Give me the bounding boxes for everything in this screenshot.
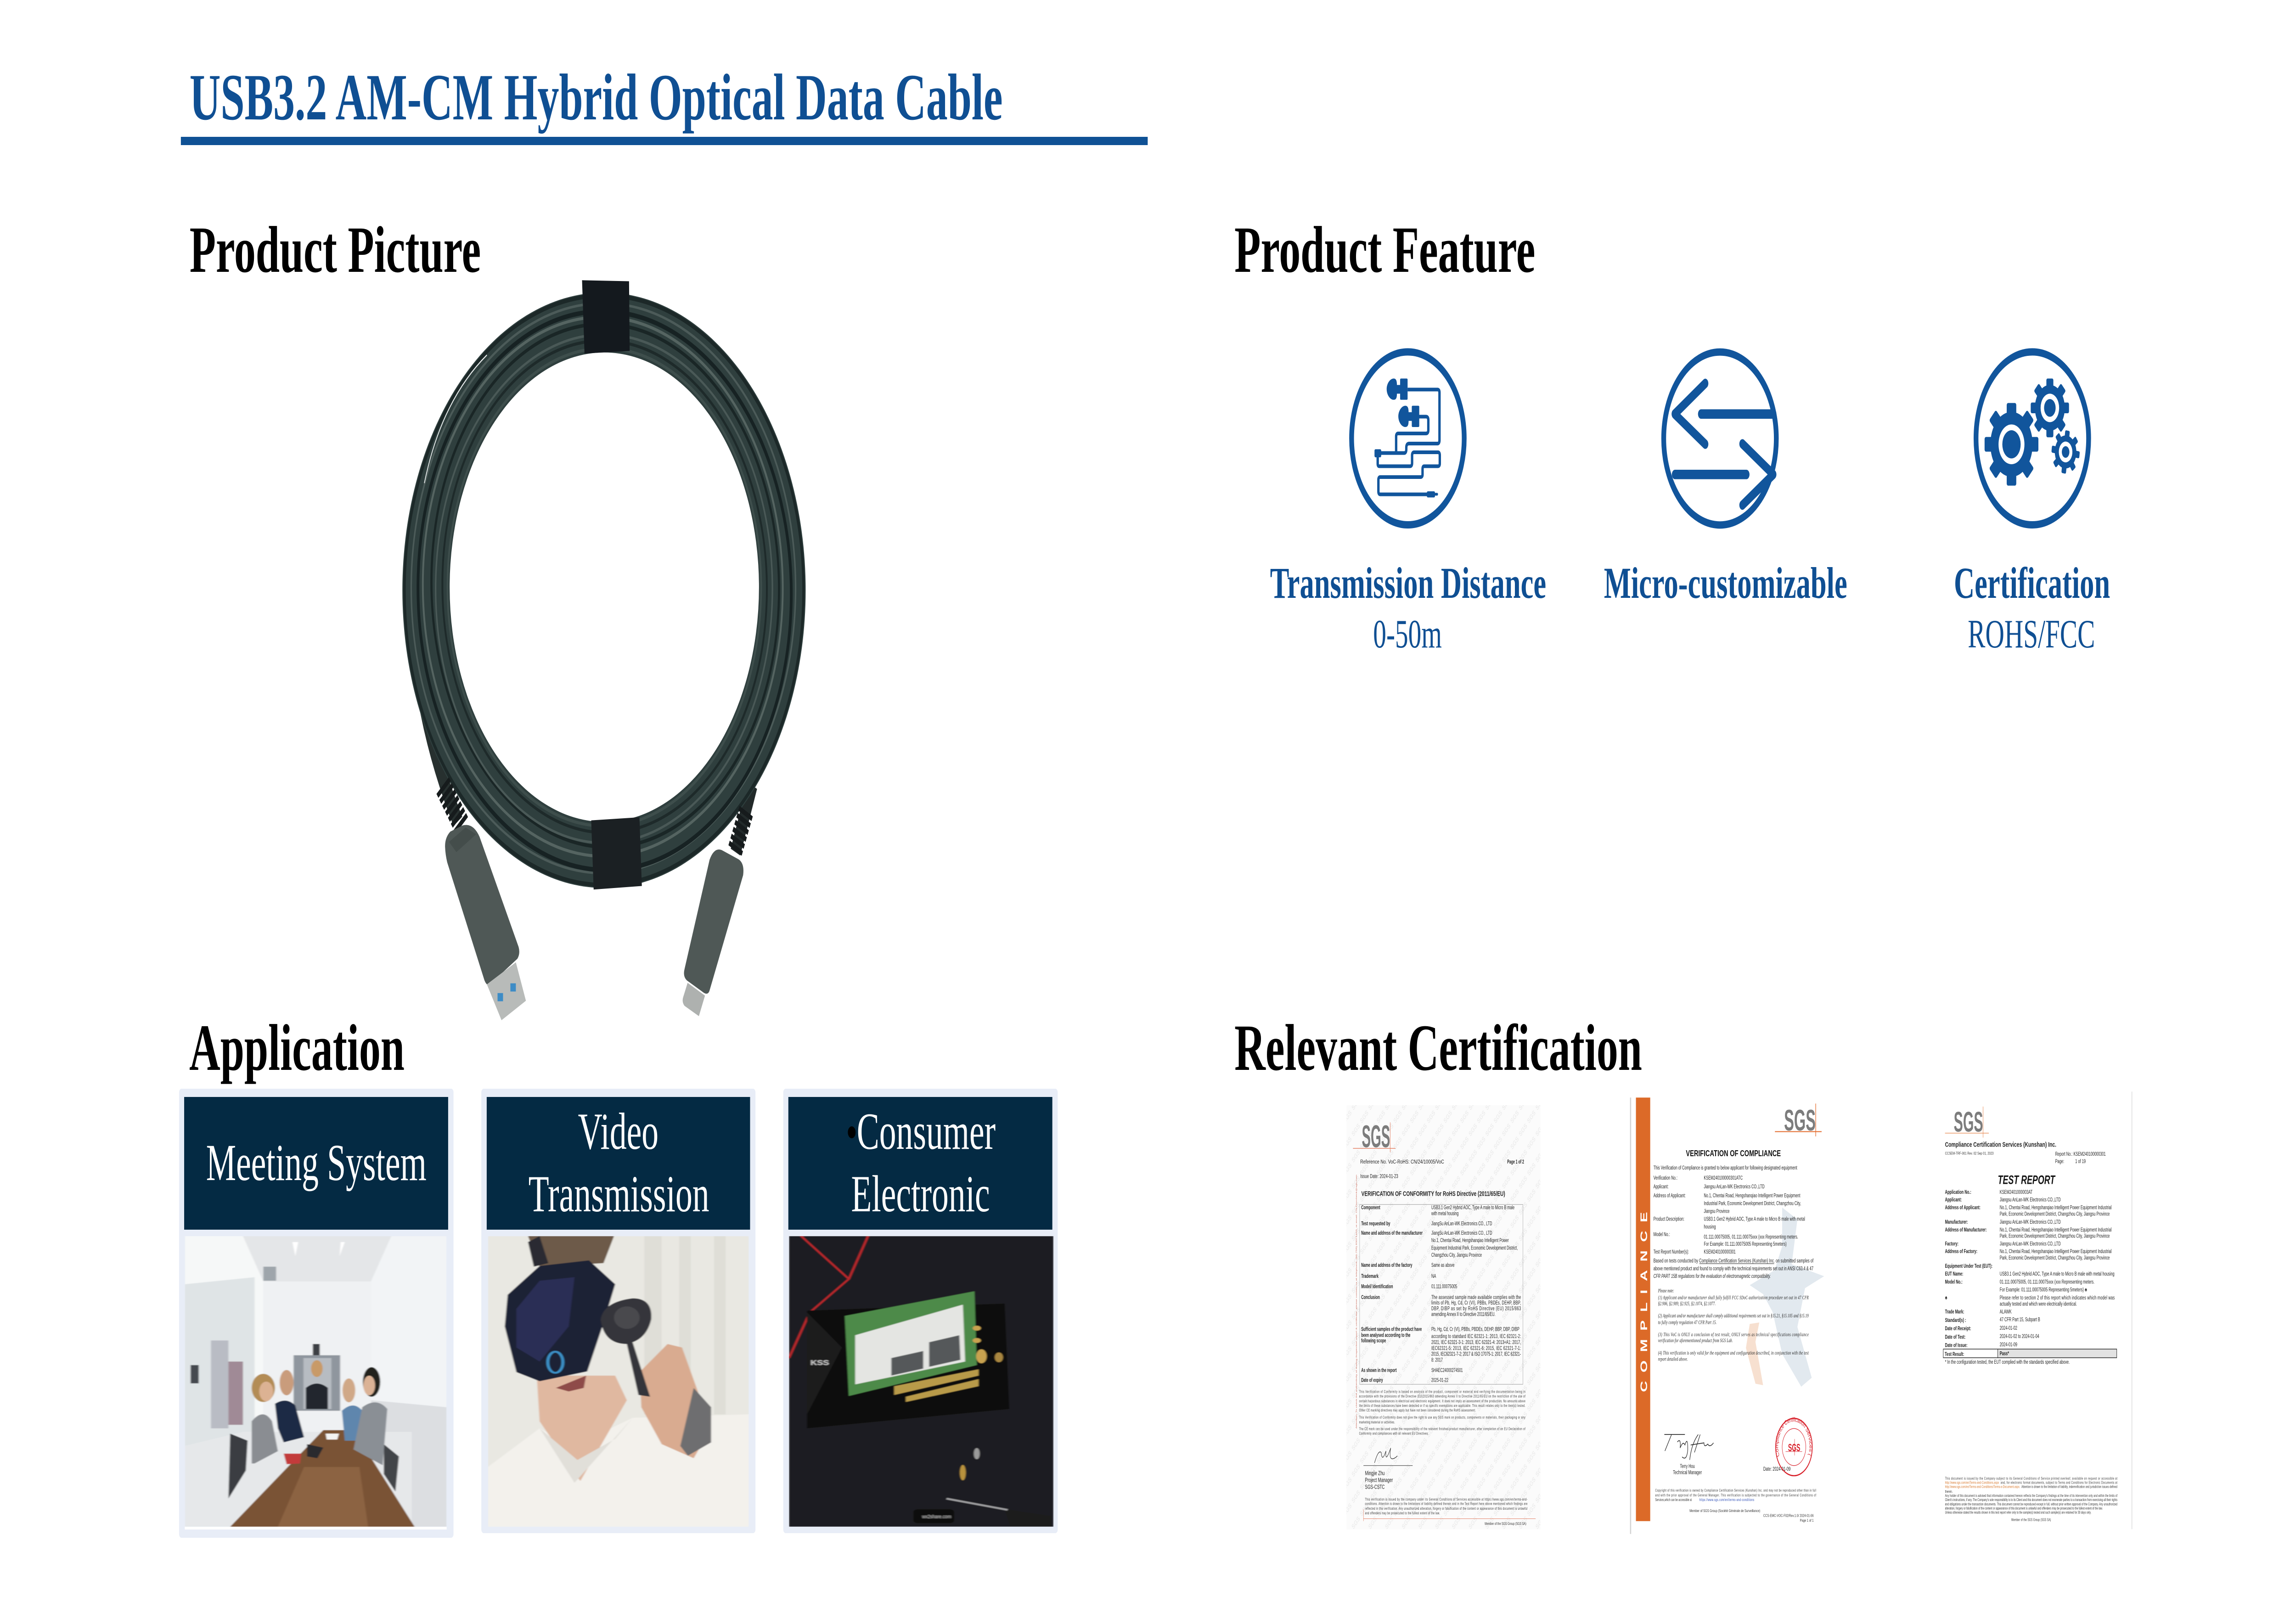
certificate: RoHS verification of conformity: DBP, DIBP as set by RoHS Directive (EU) 2015/863 (1431, 1306, 1521, 1312)
certificate: test report: actually tested and which were electrically identical. (2000, 1301, 2077, 1307)
hand (640, 1344, 711, 1458)
certificate: test report: Trade Mark: (1945, 1309, 1964, 1315)
label: Micro-customizable: Micro-customizable (1604, 559, 1847, 607)
certificate: FCC verification of compliance: No.1, Chentai Road, Hengshanqiao Intelligent Power Equipment (1704, 1193, 1801, 1199)
certificate: test report: 2024-01-09 (2000, 1342, 2017, 1348)
medium gear (2031, 378, 2069, 437)
certificate: RoHS verification of conformity: Conclusion (1361, 1294, 1380, 1300)
panel: Meeting System (179, 1089, 454, 1538)
certificate: RoHS verification of conformity: been analysed according to the (1361, 1333, 1411, 1338)
photo: SSD enclosure: wx2share.com (922, 1514, 951, 1520)
certificate: test report: therein. (1945, 1490, 1953, 1494)
certificate: FCC verification of compliance: CFR PART 15B regulations for the evaluation of electromagnetic compatibility. (1654, 1274, 1771, 1280)
certificate: RoHS verification of conformity: Conformity and compliances with all relevant EU Directives. (1359, 1432, 1429, 1436)
certificate: FCC verification of compliance: 01.111.00075005, 01.111.00075xxx (xxx Representing meters. (1704, 1234, 1798, 1240)
icon: two-way arrows (1664, 352, 1776, 525)
heading: Relevant Certification: Relevant Certification (1234, 1012, 1642, 1085)
certificate: test report: * In the configuration tested, the EUT complied with the standards specified above. (1945, 1359, 2070, 1366)
table (230, 1430, 415, 1527)
certificate: test report: USB3.1 Gen2 Hybrid AOC, Type A male to Micro B male with metal housing (2000, 1271, 2115, 1277)
heading: Application: Application (189, 1012, 405, 1085)
watermark birds (1750, 1208, 1824, 1387)
certificate: FCC verification of compliance: verification for aforementioned product from SGS Lab. (1658, 1338, 1733, 1344)
USB-C connector (683, 849, 743, 1016)
certificate: FCC verification of compliance: Applicant: (1654, 1184, 1669, 1190)
certificate: RoHS verification of conformity (1346, 1105, 1541, 1530)
label: Transmission Distance: Transmission Distance (1270, 559, 1546, 607)
certificate: RoHS verification of conformity: Project Manager (1365, 1477, 1393, 1484)
certificate: test report: Jiangsu AnLan-WK Electronics CO.,LTD (2000, 1241, 2061, 1247)
certificate: FCC verification of compliance: Model No.: (1654, 1232, 1670, 1238)
label: Video Transmission: Transmission (529, 1165, 709, 1223)
icon: cables (1351, 352, 1464, 525)
certificate: test report: http://www.sgs.com/en/Terms-and-Conditions.aspx (1945, 1481, 1999, 1485)
certificate: test report: Park, Economic Development District, Changzhou City, Jiangsu Province (2000, 1211, 2110, 1217)
label: Meeting System: Meeting System (206, 1134, 427, 1192)
certificate: RoHS verification of conformity: Component (1361, 1205, 1380, 1211)
certificate: FCC verification of compliance: KSEM240100000301 (1704, 1249, 1736, 1255)
stamp: Compliance Certification Services (Kunshan) Inc (1613, 1074, 1812, 1458)
face and shirt (488, 1414, 749, 1527)
certificate: RoHS verification of conformity: Sufficient samples of the product have (1361, 1327, 1422, 1333)
certificate: test report: For Example: 01.111.00075005 Representing 5meters) ♣ (2000, 1287, 2087, 1293)
certificate: FCC verification of compliance: USB3.1 Gen2 Hybrid AOC, Type A male to Micro B male with metal (1704, 1216, 1805, 1222)
certificate: test report (1943, 1091, 2132, 1529)
chairs (228, 1434, 248, 1499)
cable tail to USB-A (421, 688, 458, 821)
label: Consumer Electronic: Consumer (857, 1102, 996, 1160)
certificate: FCC verification of compliance: and with the prior approval of the General Manager. This verification is subjected to the governance of the General Conditions of (1655, 1494, 1816, 1497)
certificate: RoHS verification of conformity: USB3.1 Gen2 Hybrid AOC, Type A male to Micro B male (1431, 1205, 1514, 1211)
certificate: test report: Member of the SGS Group (SGS SA) (2011, 1518, 2051, 1522)
panel: Consumer Electronic (783, 1089, 1058, 1533)
certificate: RoHS verification of conformity: 2021, IEC 62321-3-1: 2013, IEC 62321-4: 2013+A1: 2017, (1431, 1339, 1521, 1346)
certificate: RoHS verification of conformity: Page 1 of 2 (1507, 1159, 1524, 1165)
certificate: test report: Park, Economic Development District, Changzhou City, Jiangsu Province (2000, 1233, 2110, 1239)
certificate: test report: Report No.: KSEM240100000301 (2055, 1152, 2106, 1158)
certificate: FCC verification of compliance: (1) Applicant and/or manufacturer shall fully fulfill FCC SDoC authorization procedure set out in 47 CFR (1658, 1295, 1809, 1301)
certificate: test report: Page: (2055, 1158, 2064, 1164)
certificate: test report: Model No.: (1945, 1279, 1963, 1285)
certificate: test report: Address of Manufacturer: (1945, 1227, 1986, 1233)
certificate: RoHS verification of conformity: NA (1431, 1274, 1436, 1280)
certificate: RoHS verification of conformity: VERIFICATION OF CONFORMITY for RoHS Directive (2011/65/EU) (1362, 1190, 1505, 1198)
certificate: FCC verification of compliance: Address of Applicant: (1654, 1193, 1686, 1199)
orange side banner (1636, 1097, 1650, 1521)
certificate: RoHS verification of conformity: 8: 2017 (1431, 1357, 1443, 1363)
video screen (293, 1355, 340, 1411)
certificate: FCC verification of compliance: (3) This VoC is ONLY a conclusion of test result, ONLY serves as technical specifications compliance (1658, 1333, 1809, 1338)
certificate: RoHS verification of conformity: reflected in this verification. Any unauthorized alteration, forgery or falsification of the content or appearance of this document is unlawful (1365, 1507, 1528, 1511)
panel: Video Transmission (481, 1089, 755, 1533)
certificate: FCC verification of compliance: Date: 2024-01-09 (1763, 1466, 1790, 1472)
certificate: test report: KSEM2401000003AT (2000, 1189, 2032, 1195)
certificate: test report: ♣ (1945, 1295, 1947, 1301)
small gear (2050, 427, 2082, 476)
people (252, 1414, 278, 1463)
certificate: FCC verification of compliance: Please note: (1658, 1288, 1674, 1294)
icon: gears (1976, 352, 2088, 525)
certificate: RoHS verification of conformity: amending Annex II to Directive 2011/65/EU. (1431, 1311, 1496, 1317)
certificate: FCC verification of compliance: (4) This verification is only valid for the equipment and configuration described, in conjunction with the test (1658, 1350, 1809, 1356)
certificate: FCC verification of compliance: Verification No.: (1654, 1175, 1677, 1181)
certificate: test report: alteration, forgery or falsification of the content or appearance of this document is unlawful and offenders may be prosecuted to the fullest extent of the law. (1945, 1507, 2103, 1511)
heading: Product Picture: Product Picture (190, 214, 481, 287)
certificate: test report: Factory: (1945, 1241, 1958, 1247)
certificate: test report: TEST REPORT (1998, 1173, 2056, 1187)
certificate: RoHS verification of conformity: JiangSu AnLan-WK Electronics CO., LTD (1431, 1230, 1492, 1236)
certificate: test report: Address of Factory: (1945, 1249, 1977, 1255)
certificate: RoHS verification of conformity: Same as above (1431, 1263, 1455, 1269)
certificate: FCC verification of compliance: Test Report Number(s): (1654, 1249, 1689, 1255)
certificate: RoHS verification of conformity: Test requested by (1361, 1221, 1390, 1227)
certificate: RoHS verification of conformity: according to standard IEC 62321-1: 2013, IEC 62321-2: (1431, 1333, 1521, 1340)
certificate: test report: Attention is drawn to the limitation of liability, indemnification and jurisdiction issues defined (2021, 1485, 2117, 1489)
certificate: FCC verification of compliance: Technical Manager (1673, 1470, 1702, 1476)
certificate: FCC verification of compliance: Member of SGS Group (Société Générale de Surveillance) (1689, 1509, 1760, 1513)
photo: meeting room (185, 1236, 447, 1527)
certificate: test report: 1 of 19 (2075, 1158, 2086, 1164)
photo: SSD enclosure (789, 1236, 1053, 1527)
certificate: FCC verification of compliance: Product Description: (1654, 1216, 1684, 1222)
feature: micro-customizable (1604, 352, 1847, 607)
stamp: SGS (1788, 1442, 1800, 1454)
cable tail to USB-C (736, 786, 752, 852)
certificate: test report: Client's instructions, if any. The Company's sole responsibility is to its Client and this document does not exonerate parties to a transaction from exercising all their rights (1945, 1498, 2117, 1502)
feature: transmission distance (1270, 352, 1546, 657)
certificate: test report: Manufacturer: (1945, 1219, 1968, 1225)
certificate: FCC verification of compliance: VERIFICATION OF COMPLIANCE (1686, 1149, 1781, 1158)
certificate: RoHS verification of conformity: This Verification of Conformity does not give the right to use any SGS mark on products, components or materials, their packaging or any (1359, 1416, 1525, 1420)
certificate: FCC verification of compliance: For Example: 01.111.00075005 Representing 5meters) (1704, 1241, 1787, 1248)
certificate: FCC verification of compliance: Terry Hou (1680, 1463, 1695, 1470)
certificate: test report: and obligations under the transaction documents. This document cannot be reproduced except in full, without prior written approval of the Company. Any unauthorized (1945, 1502, 2117, 1507)
cable coil (402, 292, 805, 888)
certificate: test report: No.1, Chentai Road, Hengshanqiao Intelligent Power Equipment Industrial (2000, 1249, 2111, 1255)
certificate: RoHS verification of conformity: Changzhou City, Jiangsu Province (1431, 1253, 1482, 1259)
certificate: FCC verification of compliance: (2) Applicant and/or manufacturer shall comply additional requirements set out in §15.21, §15.105 and §15.19 (1658, 1314, 1809, 1319)
certificate: RoHS verification of conformity: As shown in the report (1361, 1368, 1397, 1374)
orange side banner: COMPLIANCE (1638, 1212, 1649, 1392)
certificate: test report: Jiangsu AnLan-WK Electronics CO.,LTD (2000, 1197, 2061, 1203)
certificate: RoHS verification of conformity: accordance with the provisions of the Directive (EU)2015/863 amending Annex II to Directive 2011/65/EU on the restriction of the use of (1359, 1395, 1525, 1399)
certificate: test report: Compliance Certification Services (Kunshan) Inc. (1945, 1141, 2056, 1148)
certificate: RoHS verification of conformity: certain hazardous substances in electrical and electronic equipment. It does not imply an assessment of the production. No amounts above (1359, 1400, 1525, 1403)
certificate: test report: SGS (1954, 1107, 1983, 1138)
certificate: FCC verification of compliance: https://www.sgs.com/en/terms-and-conditions (1699, 1498, 1755, 1502)
certificate: test report: Application No.: (1945, 1189, 1971, 1195)
certificate: RoHS verification of conformity: Other CE marking directives may apply but have not been considered during the RoHS assessment. (1359, 1409, 1476, 1412)
certificate: RoHS verification of conformity: No.1, Chentai Road, Hengshanqiao Intelligent Power (1431, 1238, 1509, 1244)
label: ROHS/FCC: ROHS/FCC (1968, 612, 2095, 657)
certificate: RoHS verification of conformity: conditions. Attention is drawn to the limitations of liability defined therein and in the Test Report here above mentioned which findings are (1365, 1502, 1528, 1506)
certificate: RoHS verification of conformity: SGS-CSTC (1365, 1484, 1385, 1490)
certificate: test report: Date of Receipt: (1945, 1326, 1971, 1332)
certificate: RoHS verification of conformity: The CE mark can be used under the responsibility of the relevant finished-product manufacturer, after completion of an EU Declaration of (1359, 1427, 1525, 1431)
certificate: RoHS verification of conformity: and offenders may be prosecuted to the fullest extent of the law. (1365, 1512, 1440, 1515)
certificate: FCC verification of compliance: Jiangsu AnLan-WK Electronics CO.,LTD (1704, 1184, 1765, 1190)
certificate: RoHS verification of conformity: Date of expiry (1361, 1378, 1383, 1383)
certificate: FCC verification of compliance: report detailed above. (1658, 1357, 1688, 1362)
certificate: RoHS verification of conformity: Issue Date: 2024-01-23 (1360, 1174, 1398, 1180)
controller (601, 1298, 651, 1397)
certificate: RoHS verification of conformity: limits of Pb, Hg, Cd, Cr (VI), PBBs, PBDEs, DEHP, BBP, (1431, 1300, 1521, 1306)
certificate: test report: Date of Test: (1945, 1334, 1965, 1340)
certificate: FCC verification of compliance: CCS-EMC-VOC-F02/Rev.1.0/ 2024-01-06 (1763, 1514, 1814, 1518)
label: Certification: Certification (1954, 559, 2110, 607)
certificate: test report: Jiangsu AnLan-WK Electronics CO.,LTD (2000, 1219, 2061, 1225)
certificate: test report: Date of Issue: (1945, 1343, 1968, 1349)
certificate: test report: This document is issued by the Company subject to its General Conditions of Service printed overleaf, available on request or accessible at (1945, 1477, 2117, 1481)
certificate: test report: Test Result: (1945, 1351, 1964, 1358)
certificate: FCC verification of compliance: SGS (1784, 1103, 1816, 1137)
photo: SSD enclosure: KSS (810, 1359, 829, 1367)
certificate: test report: EUT Name: (1945, 1271, 1963, 1277)
certificate: RoHS verification of conformity: with metal housing (1431, 1211, 1458, 1217)
label: Consumer Electronic: Electronic (851, 1165, 990, 1223)
certificate: FCC verification of compliance: Based on tests conducted by Compliance Certification Services (Kunshan) Inc. on submitted samples of (1654, 1258, 1813, 1264)
certificate: RoHS verification of conformity: Member of the SGS Group (SGS SA) (1485, 1522, 1526, 1526)
heading: Product Feature: Product Feature (1234, 214, 1535, 287)
USB-A connector (445, 825, 526, 1020)
certificate: RoHS verification of conformity: marketing material or activities. (1359, 1421, 1395, 1424)
certificate: test report: Please refer to section 2 of this report which indicates which model was (2000, 1295, 2115, 1301)
certificate: test report: ALAWK (2000, 1309, 2012, 1315)
label: Video Transmission: Video (578, 1102, 658, 1160)
strain relief USB-A (443, 786, 462, 826)
certificate: test report: No.1, Chentai Road, Hengshanqiao Intelligent Power Equipment Industrial (2000, 1227, 2111, 1233)
certificate: test report: Any holder of this document is advised that information contained hereon reflects the Company's findings at the time of its intervention only and within the limits of (1945, 1494, 2117, 1498)
certificate: test report: Standard(s) : (1945, 1317, 1966, 1323)
certificate: FCC verification of compliance: §2.906, §2.909, §2.925, §2.1074, §2.1077. (1658, 1301, 1716, 1307)
certificate: test report: and, for electronic format documents, subject to Terms and Conditions for Electronic Documents at (2001, 1481, 2117, 1485)
certificate: test report: 2024-01-02 (2000, 1325, 2017, 1331)
label: 0-50m: 0-50m (1373, 612, 1442, 657)
certificate: RoHS verification of conformity: SGS (1362, 1119, 1390, 1154)
certificate: FCC verification of compliance (1613, 1074, 1824, 1534)
certificate: test report: 01.111.00075005, 01.111.00075xxx (xxx Representing meters. (2000, 1279, 2094, 1285)
certificate: test report: Address of Applicant: (1945, 1205, 1981, 1211)
certificate: RoHS verification of conformity: 2025-01-22 (1431, 1378, 1448, 1383)
certificate: test report: Park, Economic Development District, Changzhou City, Jiangsu Province (2000, 1255, 2110, 1261)
certificate: test report: Pass* (2000, 1351, 2009, 1357)
certificate: FCC verification of compliance: This Verification of Compliance is granted to below applicant for following designated equipment (1654, 1165, 1797, 1171)
certificate: RoHS verification of conformity: This Verification of Conformity is based on analysis of the product, component or material and verifying the documentation being in (1359, 1390, 1525, 1394)
title: USB3.2 AM-CM Hybrid Optical Data Cable (190, 61, 1003, 134)
certificate: test report: Applicant: (1945, 1197, 1962, 1203)
certificate: FCC verification of compliance: Copyright of this verification is owned by Compliance Certification Services (Kunshan) Inc. and may not be reproduced other than in full (1655, 1489, 1816, 1493)
photo: VR headset user (488, 1236, 749, 1527)
certificate: RoHS verification of conformity: JiangSu AnLan-WK Electronics CO., LTD (1431, 1221, 1492, 1227)
certificate: RoHS verification of conformity: Reference No. VoC-RoHS: CN/24/10005/VoC (1360, 1159, 1444, 1165)
certificate: test report: Unless otherwise stated the results shown in this test report refer only to the sample(s) tested and such sample(s) are retained for 30 days only. (1945, 1511, 2091, 1515)
certificate: RoHS verification of conformity: Model/ Identification (1361, 1284, 1393, 1290)
velcro strap top (582, 280, 630, 354)
certificate: FCC verification of compliance: Page 1 of 1 (1800, 1519, 1814, 1523)
certificate: test report: CCSEM-TRF-001 Rev. 02 Sep 01, 2023 (1945, 1152, 1994, 1156)
large gear (1985, 403, 2038, 486)
certificate: FCC verification of compliance: housing (1704, 1224, 1716, 1230)
certificate: test report: Equipment Under Test (EUT): (1945, 1264, 1992, 1270)
certificate: test report: 47 CFR Part 15, Subpart B (2000, 1317, 2040, 1323)
certificate: FCC verification of compliance: Industrial Park, Economic Development District, Changzhou City, (1704, 1201, 1801, 1207)
certificate: RoHS verification of conformity: IEC62321-5: 2013, IEC 62321-6: 2015, IEC 62321-7-1: (1431, 1345, 1521, 1352)
certificate: RoHS verification of conformity: This verification is issued by the company under its General Conditions of Services accessible at https://www.sgs.com/en/terms-and- (1365, 1498, 1527, 1501)
certificate: FCC verification of compliance: to fully comply regulation 47 CFR Part 15. (1658, 1320, 1716, 1326)
strain relief USB-C (735, 811, 746, 852)
certificate: RoHS verification of conformity: 01.111.00075005 (1431, 1284, 1457, 1290)
certificate: FCC verification of compliance: KSEM240100000301ATC (1704, 1175, 1743, 1181)
certificate: FCC verification of compliance: Services,which can be accessible at (1655, 1498, 1692, 1502)
headset (505, 1260, 615, 1381)
certificate: test report: 2024-01-02 to 2024-01-04 (2000, 1333, 2039, 1340)
certificate: RoHS verification of conformity: The assessed sample made available complies with the (1431, 1294, 1521, 1300)
certificate: RoHS verification of conformity: Mingjie Zhu (1365, 1470, 1384, 1477)
certificate: RoHS verification of conformity: following scope (1361, 1338, 1386, 1344)
certificate: RoHS verification of conformity: 2015, IEC62321-7-2: 2017 & ISO 17075-1: 2017, IEC 62321- (1431, 1351, 1521, 1357)
certificate: RoHS verification of conformity: Equipment Industrial Park, Economic Development District, (1431, 1245, 1518, 1251)
product photo: coiled cable (402, 280, 805, 1020)
certificate: RoHS verification of conformity: Pb, Hg, Cd, Cr (VI), PBBs, PBDEs, DEHP, BBP, DBP, DIBP (1431, 1327, 1519, 1333)
certificate: RoHS verification of conformity: Attention: To check the authenticity of testing /inspection report & certificate, please contact us at telephone: (86-755) 83071443, or email: CN.Doccheck@sgs.com (1356, 1175, 1358, 1428)
certificate: RoHS verification of conformity: Trademark (1361, 1274, 1379, 1280)
certificate: RoHS verification of conformity: Name and address of the manufacturer (1361, 1230, 1423, 1236)
certificate: FCC verification of compliance: Jiangsu Province (1704, 1209, 1730, 1215)
certificate: test report: http://www.sgs.com/en/Terms-and-Conditions/Terms-e-Document.aspx. (1945, 1485, 2020, 1489)
label: Consumer Electronic (848, 1102, 996, 1223)
certificate: RoHS verification of conformity: Name and address of the factory (1361, 1263, 1412, 1269)
certificate: FCC verification of compliance: above mentioned product and found to comply with the technical requirements set out in ANSI C63.4 & 47 (1654, 1266, 1813, 1272)
certificate: test report: No.1, Chentai Road, Hengshanqiao Intelligent Power Equipment Industrial (2000, 1205, 2111, 1211)
feature: certification (1954, 352, 2110, 657)
certificate: RoHS verification of conformity: SHAEC24000274501 (1431, 1368, 1463, 1374)
certificate: RoHS verification of conformity: the limits of these substances have been detected or if so specific exemptions are applicable. This result relates only to the item(s) tested. (1359, 1404, 1525, 1408)
velcro strap bottom (591, 817, 642, 889)
